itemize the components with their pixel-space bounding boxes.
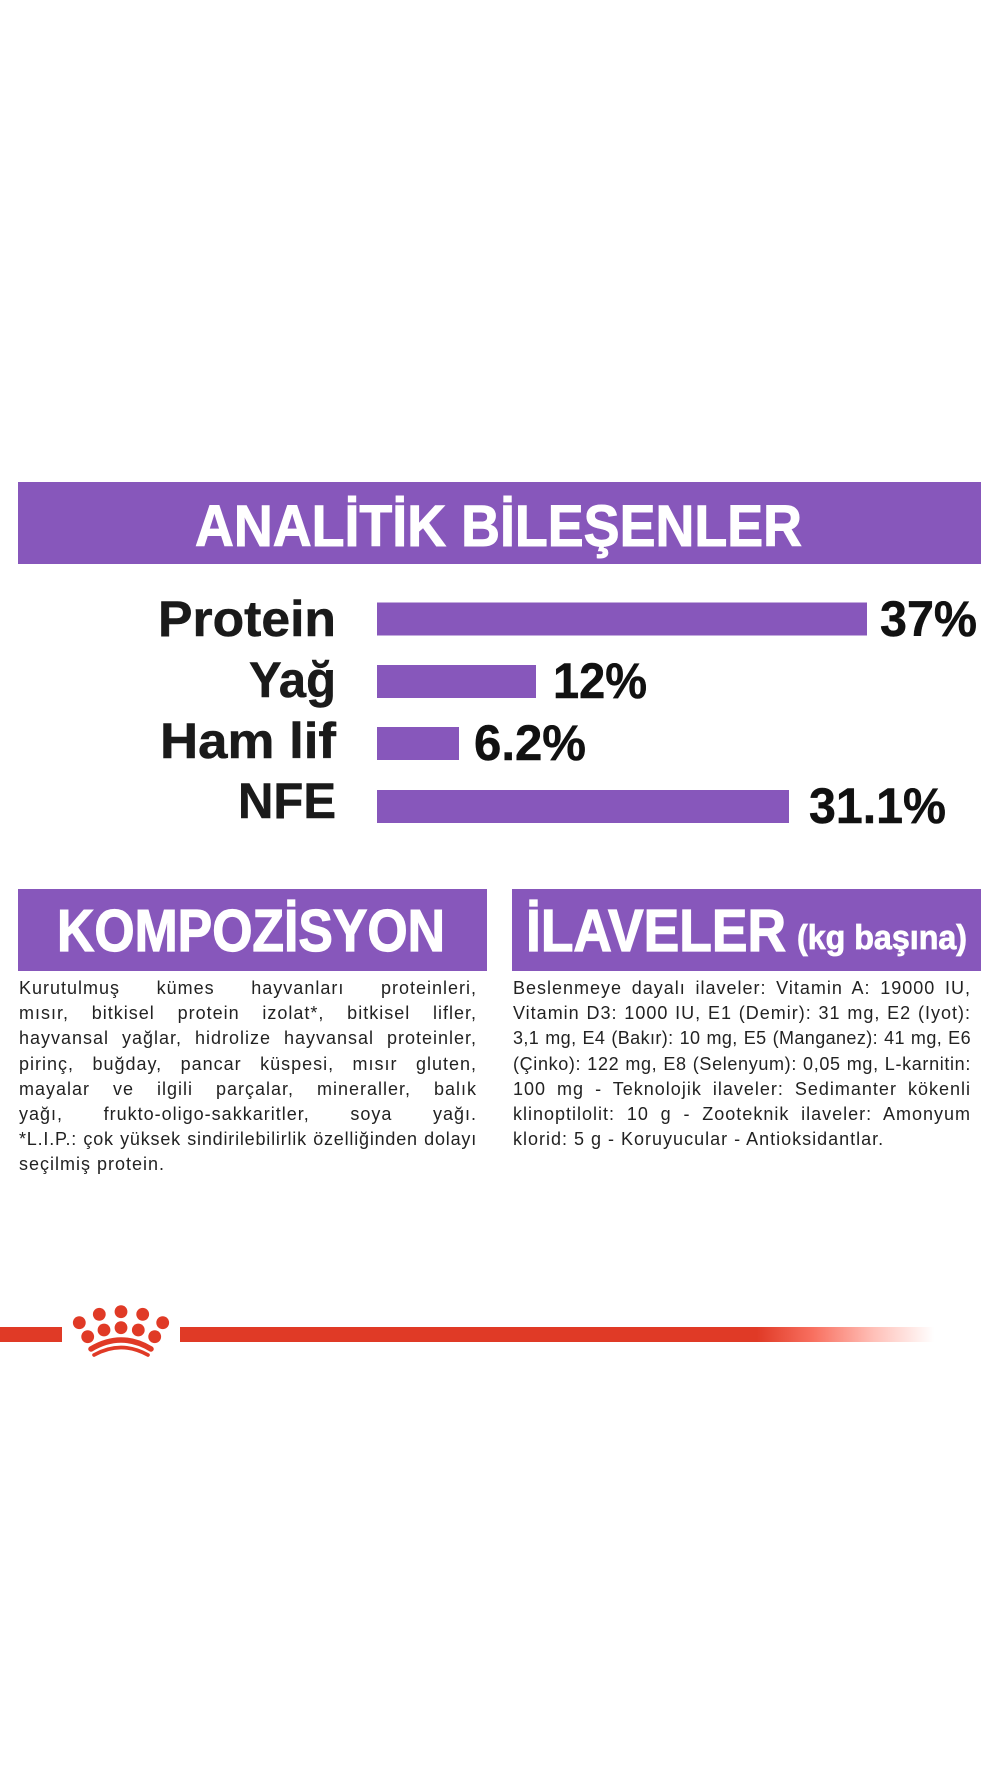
text block: additives: 3,1 mg, E4 (Bakır): 10 mg, E5 (Manganez): 41 mg, E6 (513, 1028, 971, 1048)
text block: additives: 100 mg - Teknolojik ilaveler: Sedimanter kökenli (513, 1079, 971, 1099)
text block: composition: hayvansal yağlar, hidrolize hayvansal proteinler, (19, 1028, 477, 1048)
text block: additives (513, 978, 971, 1149)
bar chart (158, 591, 977, 834)
row: Yağ 12% (249, 652, 647, 709)
text block: additives: (Çinko): 122 mg, E8 (Selenyum): 0,05 mg, L-karnitin: (513, 1054, 971, 1074)
row: Ham lif 6.2% (160, 713, 586, 771)
text block: composition (19, 978, 477, 1174)
row: NFE 31.1%: NFE (238, 773, 336, 829)
text block: composition: pirinç, buğday, pancar küspesi, mısır gluten, (19, 1054, 477, 1074)
heading banner: İlaveler (512, 889, 981, 971)
row: Ham lif 6.2%: Ham lif (160, 713, 336, 769)
text block: composition: mayalar ve ilgili parçalar, mineraller, balık (19, 1079, 477, 1099)
row: NFE 31.1%: 31.1% (809, 778, 946, 834)
footer red line right with fade (180, 1327, 934, 1342)
row: Protein 37%: 37% (880, 591, 977, 647)
heading banner: Analitik Bileşenler (18, 482, 981, 564)
text block: composition: mısır, bitkisel protein izolat*, bitkisel lifler, (19, 1003, 477, 1023)
text block: additives: klorid: 5 g - Koruyucular - Antioksidantlar. (513, 1129, 884, 1149)
heading banner: İlaveler: (kg başına) (797, 919, 967, 957)
heading banner: İlaveler: İLAVELER (526, 898, 786, 964)
text block: additives: Vitamin D3: 1000 IU, E1 (Demir): 31 mg, E2 (Iyot): (513, 1003, 971, 1023)
row: Protein 37%: Protein (158, 591, 336, 647)
row: Yağ 12%: Yağ (249, 652, 336, 708)
text block: composition: seçilmiş protein. (19, 1154, 165, 1174)
text block: composition: *L.I.P.: çok yüksek sindirilebilirlik özelliğinden dolayı (19, 1129, 477, 1149)
icon: royal crown logo (73, 1305, 169, 1355)
panel: analytical components (18, 482, 981, 834)
row: NFE 31.1% (238, 773, 946, 834)
text block: additives: klinoptilolit: 10 g - Zooteknik ilaveler: Amonyum (513, 1104, 971, 1124)
footer red line left (0, 1327, 62, 1342)
text block: composition: Kurutulmuş kümes hayvanları proteinleri, (19, 978, 477, 998)
text block: composition: yağı, frukto-oligo-sakkaritler, soya yağı. (19, 1104, 477, 1124)
row: Yağ 12%: 12% (553, 653, 647, 709)
row: Ham lif 6.2%: 6.2% (474, 715, 586, 771)
text block: additives: Beslenmeye dayalı ilaveler: Vitamin A: 19000 IU, (513, 978, 971, 998)
heading banner: Kompozisyon: KOMPOZİSYON (57, 898, 445, 964)
heading banner: Analitik Bileşenler: ANALİTİK BİLEŞENLER (195, 494, 802, 559)
row: Protein 37% (158, 591, 977, 647)
